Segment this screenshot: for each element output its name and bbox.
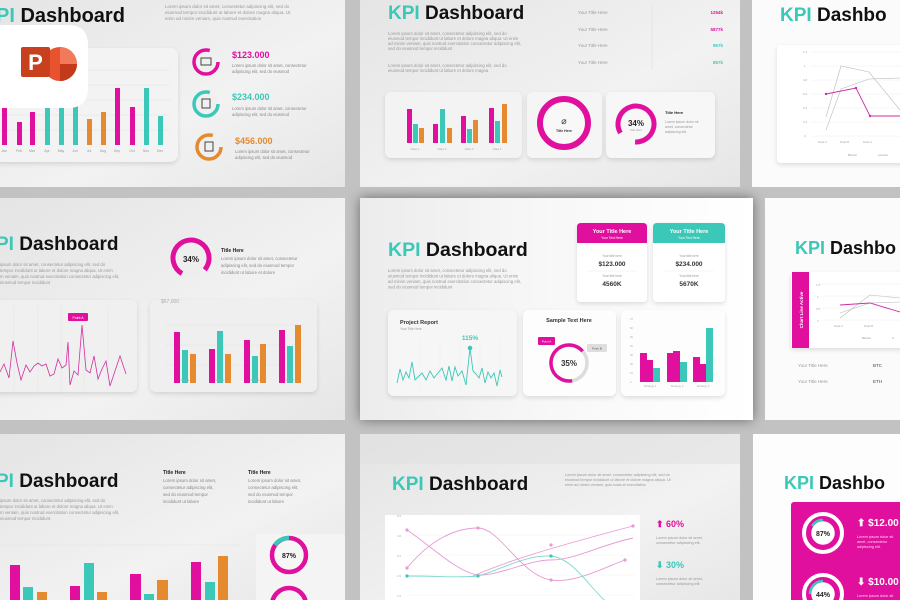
bar chart: monthly: Apr — [44, 149, 51, 153]
text: title columns — [163, 470, 301, 504]
ring card: title: Title Here — [556, 129, 572, 133]
slide: bottom-right — [753, 434, 900, 600]
card: bar chart strategy: 50 — [630, 336, 633, 339]
ring card: 34% — [606, 92, 715, 158]
ring card: 34%: adipiscing elit. — [665, 130, 687, 134]
list: titles and values: Your Title Here — [578, 43, 608, 48]
stat: up 60%: Lorem ipsum dolor sit amet, — [656, 536, 703, 540]
ring card: title — [527, 92, 602, 158]
line chart card with label: Bitcoin — [862, 336, 871, 340]
ring card: 87% — [282, 553, 297, 560]
title: KPI Dashbo — [795, 238, 896, 258]
line chart card: Data C — [863, 140, 873, 144]
card: magenta KPI — [577, 223, 647, 302]
card: teal KPI: Your title here — [679, 254, 699, 258]
text block: ipsum dolor sit amet, consectetur adipiscing elit, sed do — [0, 498, 106, 503]
slide: bottom-middle — [360, 434, 740, 600]
line chart card: Data B — [840, 140, 849, 144]
ring card: 34%: Title Here — [665, 110, 684, 115]
text block — [0, 498, 119, 521]
line chart card with label: Data B — [864, 324, 873, 328]
card: project report: 115% — [462, 335, 478, 342]
ring card: 34%: Title Here — [630, 128, 642, 132]
card: sample ring 35%: 35% — [561, 359, 577, 368]
text block: ad minim veniam, quis nostrud exercitation consectetur adipiscing elit, — [388, 41, 521, 46]
stat list with rings: $234.000 — [232, 92, 270, 102]
bar chart card: $67,000 — [161, 299, 179, 305]
bar chart card: Data 2 — [438, 147, 447, 151]
line chart card with label: Li — [892, 336, 895, 340]
ring: 34%: 34% — [183, 255, 199, 264]
line chart: 5.0 — [397, 514, 402, 518]
text block: m veniam, quis nostrud exercitation consectetur adipiscing elit, — [0, 510, 119, 515]
stat list with rings: Lorem ipsum dolor sit amet, consectetur — [235, 149, 310, 154]
text: title columns: Title Here — [248, 470, 271, 476]
text block: ad minim veniam, quis nostrud exercitation consectetur adipiscing elit, — [388, 279, 521, 284]
card: teal KPI: $234.000 — [675, 261, 703, 268]
line chart card: Bitcoin — [848, 153, 857, 157]
card: bar chart strategy: Strategy 2 — [671, 384, 684, 388]
text block — [565, 473, 672, 487]
stat: down 30%: Lorem ipsum dolor sit amet, — [656, 577, 703, 581]
magenta stats panel: Lorem ipsum dolor sit — [857, 535, 894, 539]
stat: up 60% — [656, 519, 703, 545]
text block: eiusmod tempor incididunt ut labore et dolore magna aliqua. Ut enim — [388, 36, 519, 41]
card: sample ring 35% — [523, 310, 616, 396]
text block: Lorem ipsum dolor sit amet, consectetur adipiscing elit, sed do — [388, 31, 507, 36]
ring: 34% — [166, 233, 216, 283]
card: bar chart strategy — [621, 310, 725, 396]
stat: down 30% — [656, 560, 703, 586]
list: titles and values: Your Title Here — [578, 27, 608, 32]
card: teal KPI — [653, 223, 725, 302]
ring card: 34%: amet, consectetur — [665, 125, 694, 129]
text block: tempor incididunt ut labore et dolore magna aliqua. Ut enim — [0, 504, 113, 509]
list: titles and values: 5877k — [710, 27, 723, 32]
text: title columns: Lorem ipsum dolor sit amet, — [163, 478, 216, 483]
bar chart card: Data 3 — [465, 147, 474, 151]
line chart card: Litecoin — [878, 153, 889, 157]
line chart card: 0.2 — [803, 120, 808, 124]
stat list with rings: adipiscing elit, sed do eiusmod — [235, 155, 293, 160]
stat list with rings — [194, 50, 310, 160]
slide: middle-right — [765, 198, 900, 420]
text block: ipsum dolor sit amet, consectetur adipiscing elit, sed do — [0, 262, 106, 267]
bar chart card: Data 1 — [181, 378, 190, 382]
list: titles and values — [578, 6, 723, 70]
title: KPI Dashbo — [780, 5, 887, 26]
list: titles and values: 857k — [713, 43, 723, 48]
card: sample ring 35%: Sample Text Here — [546, 318, 592, 324]
text: title here — [221, 248, 298, 275]
line chart card: 1 — [804, 64, 806, 68]
line chart card: 0.8 — [803, 78, 808, 82]
text: title columns: incididunt ut labore — [163, 499, 200, 504]
bar chart: monthly: Sep — [114, 149, 120, 153]
bar chart: monthly: Aug — [100, 149, 106, 153]
text: title columns: sed do eiusmod tempor — [248, 492, 293, 497]
card: bar chart strategy: 70 — [630, 318, 633, 321]
bar chart card: Data 4 — [493, 147, 502, 151]
text block: Lorem ipsum dolor sit amet, consectetur adipiscing elit, sed do — [388, 268, 507, 273]
line chart card with label: 1.5 — [816, 283, 821, 287]
text block: enim ad minim veniam, quis nostrud exercitation — [565, 483, 646, 487]
card: bar chart strategy: 30 — [630, 354, 633, 357]
magenta stats panel: 44% — [816, 592, 831, 599]
bar chart card: Data 1 — [411, 147, 420, 151]
card: teal KPI: Your title here — [679, 274, 699, 278]
list: titles and values: 857k — [713, 60, 723, 65]
text block: eiusmod tempor incididunt ut labore et dolore magna aliqua. Ut enim — [388, 274, 519, 278]
stat: up 60%: consectetur adipiscing elit. — [656, 541, 701, 545]
line chart: 2.0 — [397, 574, 402, 578]
text: title columns: consectetur adipiscing elit, — [248, 485, 298, 490]
text: title here: adipiscing elit, sed do eiusmod tempor — [221, 263, 295, 268]
magenta stats panel: Lorem ipsum dolor sit — [857, 594, 894, 598]
magenta stats panel: 87% — [816, 531, 831, 538]
bar chart card: Data 3 — [251, 378, 260, 382]
text block — [0, 262, 119, 285]
list: titles and values: 1254k — [710, 10, 723, 15]
text: title columns: incididunt ut labore — [248, 499, 285, 504]
slide: middle-left — [0, 198, 345, 420]
line chart card with label: 0.5 — [816, 307, 821, 311]
card: sample ring 35%: Point B — [592, 346, 602, 350]
line chart card with label: Data A — [834, 324, 843, 328]
line chart card — [0, 300, 137, 392]
card: sample ring 35%: Point A — [542, 340, 551, 344]
text: title here: Lorem ipsum dolor sit amet, consectetur — [221, 256, 298, 261]
bar chart: monthly: Nov — [143, 149, 149, 153]
text block: m veniam, quis nostrud exercitation consectetur adipiscing elit, — [0, 274, 119, 279]
bar chart: monthly: Jun — [72, 149, 78, 153]
stat list with rings: Lorem ipsum dolor sit amet, consectetur — [232, 63, 307, 68]
text: title here: incididunt ut labore et dolore — [221, 270, 276, 275]
line chart card: 1.2 — [803, 50, 808, 54]
line chart card: 0.6 — [803, 92, 808, 96]
icon: PowerPoint logo: P — [28, 50, 43, 75]
magenta stats panel: ⬆ $12.00 — [857, 518, 899, 529]
bar chart: monthly: May — [58, 149, 65, 153]
bar chart: monthly: Jan — [1, 149, 7, 153]
card: bar chart strategy: 40 — [630, 345, 633, 348]
stat list with rings: $123.000 — [232, 50, 270, 60]
text block: eiusmod tempor incididunt ut labore et dolore magna aliqua. Ut — [165, 10, 291, 15]
line chart — [385, 514, 640, 600]
card: bar chart strategy: 20 — [630, 363, 633, 366]
card: magenta KPI: $123.000 — [598, 261, 626, 268]
text block: tempor incididunt ut labore et dolore magna aliqua. Ut enim — [0, 268, 113, 273]
bar chart: monthly — [0, 48, 178, 162]
magenta stats panel: amet, consectetur — [857, 540, 888, 544]
text block — [388, 31, 521, 73]
card: bar chart strategy: 0 — [630, 381, 632, 384]
magenta stats panel: adipiscing elit. — [857, 545, 881, 549]
bar chart card: Data 2 — [216, 378, 225, 382]
line chart card: 0.4 — [803, 106, 808, 110]
stat: down 30%: consectetur adipiscing elit. — [656, 582, 701, 586]
text: title here: Title Here — [221, 248, 244, 254]
card: bar chart strategy: 10 — [630, 372, 633, 375]
card: magenta KPI: Your Text Here — [601, 236, 623, 240]
icon: PowerPoint logo — [0, 25, 88, 108]
card: bar chart strategy: 60 — [630, 327, 633, 330]
slide: top-middle — [360, 0, 740, 187]
text block: sed do eiusmod tempor incididunt — [388, 284, 453, 290]
list: Your Title Here — [798, 379, 828, 384]
card: magenta KPI: Your title here — [602, 274, 622, 278]
card: teal KPI: Your Text Here — [678, 236, 700, 240]
title: KPI Dashbo — [784, 473, 885, 493]
list: BTC — [873, 363, 883, 368]
text block: eiusmod tempor incididunt — [0, 280, 51, 285]
stat: down 30%: ⬇ 30% — [656, 560, 684, 570]
list: titles and values: Your Title Here — [578, 60, 608, 65]
text block — [165, 4, 291, 21]
ring card: 34%: Lorem ipsum dolor sit — [665, 120, 698, 124]
bar chart: monthly: Dec — [157, 149, 163, 153]
text block: eiusmod tempor incididunt — [0, 516, 51, 521]
card: project report — [388, 310, 517, 396]
bar chart — [0, 545, 240, 600]
text block — [388, 268, 521, 290]
slide: top-left — [0, 0, 345, 187]
bar chart: monthly: Mar — [29, 149, 36, 153]
line chart card: Point A — [72, 316, 84, 320]
line chart: 3.0 — [397, 554, 402, 558]
stat: up 60%: ⬆ 60% — [656, 519, 684, 529]
line chart: 1.0 — [397, 594, 402, 598]
line chart card — [777, 45, 900, 163]
slide: top-right — [752, 0, 900, 187]
bar chart card: Data 4 — [286, 378, 295, 382]
text: title columns: consectetur adipiscing elit, — [163, 485, 213, 490]
title: KPI Dashboard — [392, 474, 528, 495]
text block: eiusmod tempor incididunt ut labore et dolore magna — [388, 68, 489, 73]
ring card: 34%: 34% — [628, 119, 644, 128]
card: project report: Project Report — [400, 320, 438, 326]
card: magenta KPI: Your Title Here — [593, 229, 631, 235]
bar chart: monthly: Jul — [87, 149, 91, 153]
line chart card with label — [791, 272, 900, 348]
list: ETH — [873, 379, 882, 384]
line chart card with label: 0 — [817, 319, 819, 323]
stat list with rings: $456.000 — [235, 136, 273, 146]
ring card — [256, 534, 345, 600]
text block: sed do eiusmod tempor incididunt — [388, 46, 453, 51]
list — [798, 363, 883, 384]
stat list with rings: adipiscing elit, sed do eiusmod — [232, 69, 290, 74]
magenta stats panel: ⬇ $10.00 — [857, 577, 899, 588]
text block: enim ad minim veniam, quis nostrud exercitation — [165, 16, 262, 21]
stat list with rings: adipiscing elit, sed do eiusmod — [232, 112, 290, 117]
card: magenta KPI: 4560K — [602, 281, 622, 288]
slide: bottom-left — [0, 434, 345, 600]
line chart card: 0 — [804, 134, 806, 138]
card: teal KPI: 5670K — [679, 281, 699, 288]
text block: Lorem ipsum dolor sit amet, consectetur adipiscing elit, sed do — [565, 473, 670, 477]
text block: Lorem ipsum dolor sit amet, consectetur adipiscing elit, sed do — [388, 63, 507, 68]
bar chart card — [150, 299, 317, 392]
slide: center (featured) — [360, 198, 753, 420]
card: bar chart strategy: Strategy 1 — [644, 384, 657, 388]
bar chart card — [385, 92, 522, 158]
bar chart: monthly: Oct — [129, 149, 135, 153]
text: title columns: sed do eiusmod tempor — [163, 492, 208, 497]
text: title columns: Title Here — [163, 470, 186, 476]
title: KPI Dashboard — [388, 3, 524, 24]
line chart card with label: 1 — [817, 295, 819, 299]
stat list with rings: Lorem ipsum dolor sit amet, consectetur — [232, 106, 307, 111]
text block: Lorem ipsum dolor sit amet, consectetur adipiscing elit, sed do — [165, 4, 290, 9]
title: KPI Dashboard — [388, 239, 528, 261]
text block: eiusmod tempor incididunt ut labore et dolore magna aliqua. Ut — [565, 478, 672, 482]
line chart: 4.0 — [397, 534, 402, 538]
bar chart: monthly: Feb — [16, 149, 22, 153]
card: magenta KPI: Your title here — [602, 254, 622, 258]
card: bar chart strategy: Strategy 3 — [697, 384, 710, 388]
line chart card: Data A — [818, 140, 827, 144]
card: project report: Your Title Here — [400, 327, 422, 331]
list: Your Title Here — [798, 363, 828, 368]
card: teal KPI: Your Title Here — [670, 229, 708, 235]
line chart card with label: Chart Line Active — [799, 291, 804, 328]
magenta stats panel — [791, 502, 900, 600]
text: title columns: Lorem ipsum dolor sit amet, — [248, 478, 301, 483]
ring card: title: ⌀ — [561, 116, 567, 126]
list: titles and values: Your Title Here — [578, 10, 608, 15]
